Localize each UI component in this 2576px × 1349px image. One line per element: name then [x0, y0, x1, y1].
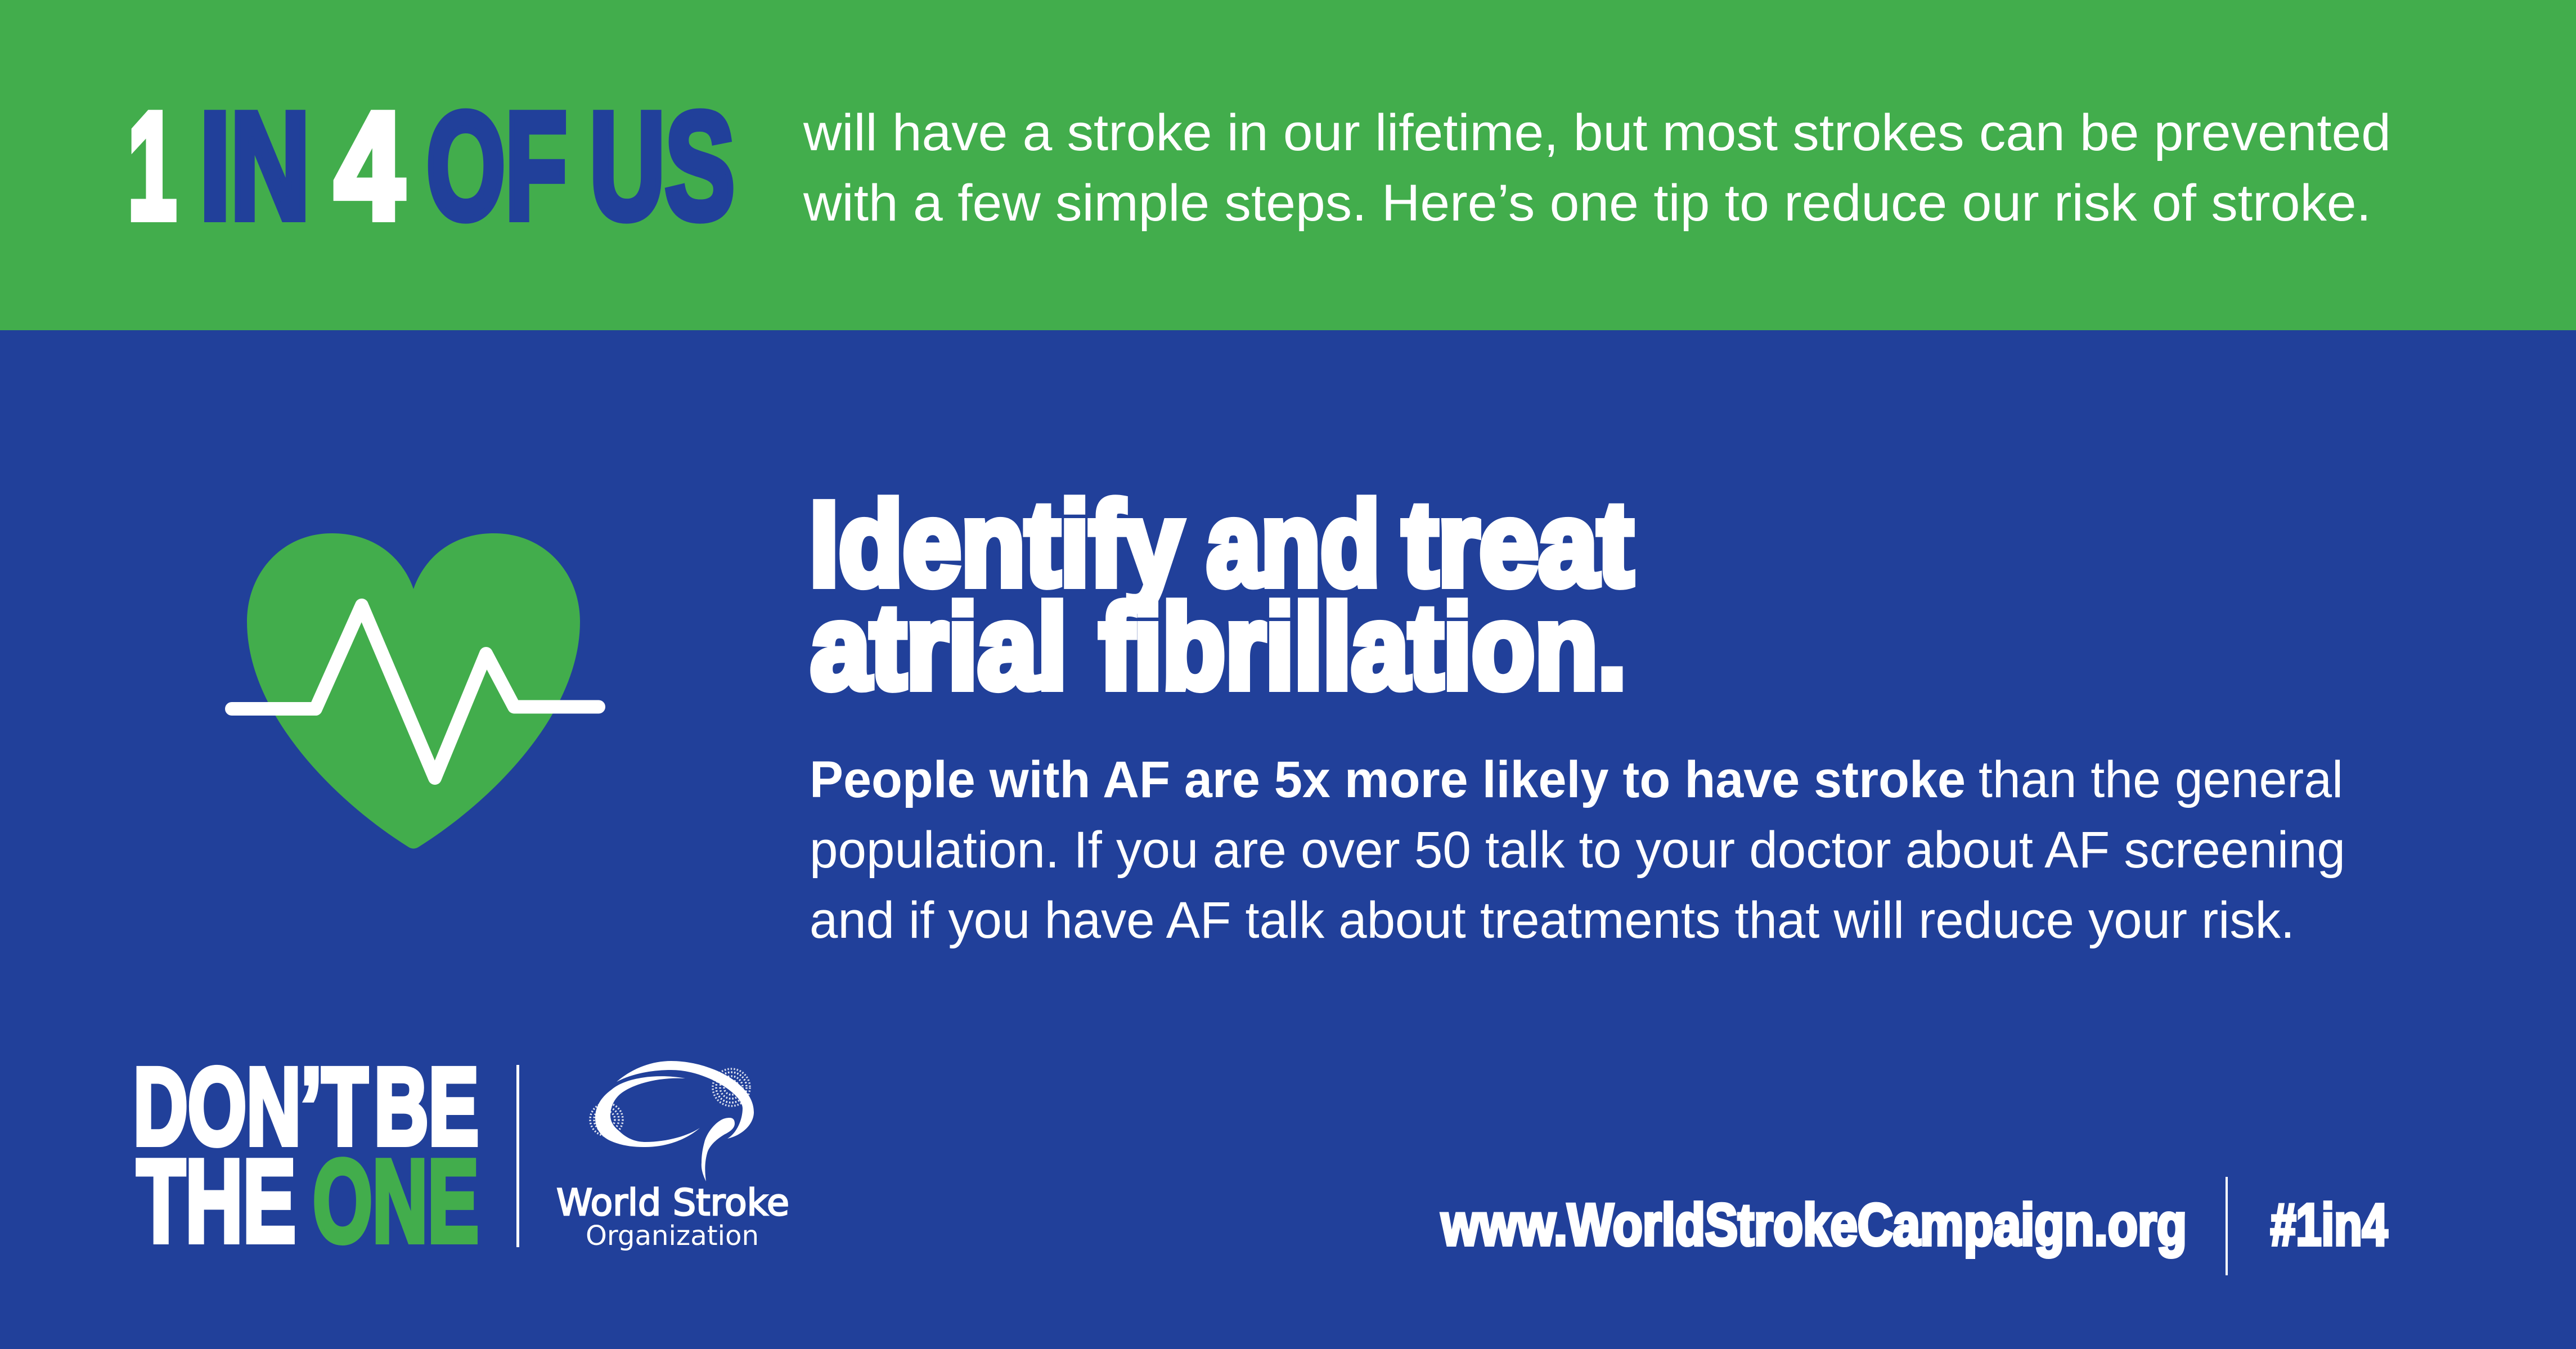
text block: atrial fibrillation advice: and if you have AF talk about treatments that will reduce your risk. — [810, 892, 2295, 949]
logo mark: dotted burst left — [590, 1103, 623, 1136]
pulse line — [232, 605, 599, 778]
heading: identify and treat atrial fibrillation — [810, 477, 1633, 713]
heading: identify and treat atrial fibrillation: Identify — [810, 477, 1183, 610]
hashtag: #1in4 — [2271, 1192, 2388, 1258]
text block: atrial fibrillation advice: People with AF are 5x more likely to have stroke — [810, 751, 1966, 808]
logo: don't be the one — [133, 1045, 479, 1267]
logo text: organization: Organization — [586, 1220, 759, 1252]
logo: don't be the one: DON’T — [133, 1045, 368, 1168]
icon: heart with pulse line — [232, 533, 599, 848]
logo text: world stroke: World Stroke — [556, 1182, 789, 1224]
heading: 1 in 4 of us: OF — [426, 82, 567, 251]
logo mark: brain swoosh — [595, 1061, 754, 1181]
text block: banner intro — [803, 104, 2391, 232]
text block: banner intro: with a few simple steps. Here’s one tip to reduce our risk of stroke. — [803, 174, 2371, 232]
heading: 1 in 4 of us: IN — [200, 82, 310, 251]
text block: atrial fibrillation advice: than the general — [1979, 751, 2343, 808]
logo: world stroke organization — [556, 1061, 789, 1252]
divider: logos — [516, 1065, 519, 1247]
heading: identify and treat atrial fibrillation: atrial — [811, 580, 1067, 713]
text block: banner intro: will have a stroke in our lifetime, but most strokes can be prevented — [803, 104, 2391, 161]
heart shape — [247, 533, 580, 848]
heading: identify and treat atrial fibrillation: and — [1207, 477, 1380, 610]
heading: 1 in 4 of us: 1 — [128, 82, 177, 251]
logo: don't be the one: THE — [137, 1136, 296, 1267]
panel: green top banner — [0, 0, 2576, 330]
heading: 1 in 4 of us — [128, 82, 735, 251]
divider: footer — [2226, 1177, 2228, 1275]
text block: atrial fibrillation advice — [810, 751, 2345, 949]
text block: atrial fibrillation advice: population. If you are over 50 talk to your doctor about AF screening — [810, 821, 2345, 879]
link: campaign website: www.WorldStrokeCampaign.org — [1441, 1192, 2187, 1258]
logo: don't be the one: ONE — [313, 1136, 479, 1267]
heading: 1 in 4 of us: 4 — [335, 82, 404, 251]
heading: identify and treat atrial fibrillation: treat — [1402, 477, 1633, 610]
heading: 1 in 4 of us: US — [590, 82, 735, 251]
heading: identify and treat atrial fibrillation: fibrillation. — [1099, 580, 1626, 713]
logo: don't be the one: BE — [374, 1045, 479, 1168]
logo mark: dotted burst right — [713, 1069, 750, 1106]
